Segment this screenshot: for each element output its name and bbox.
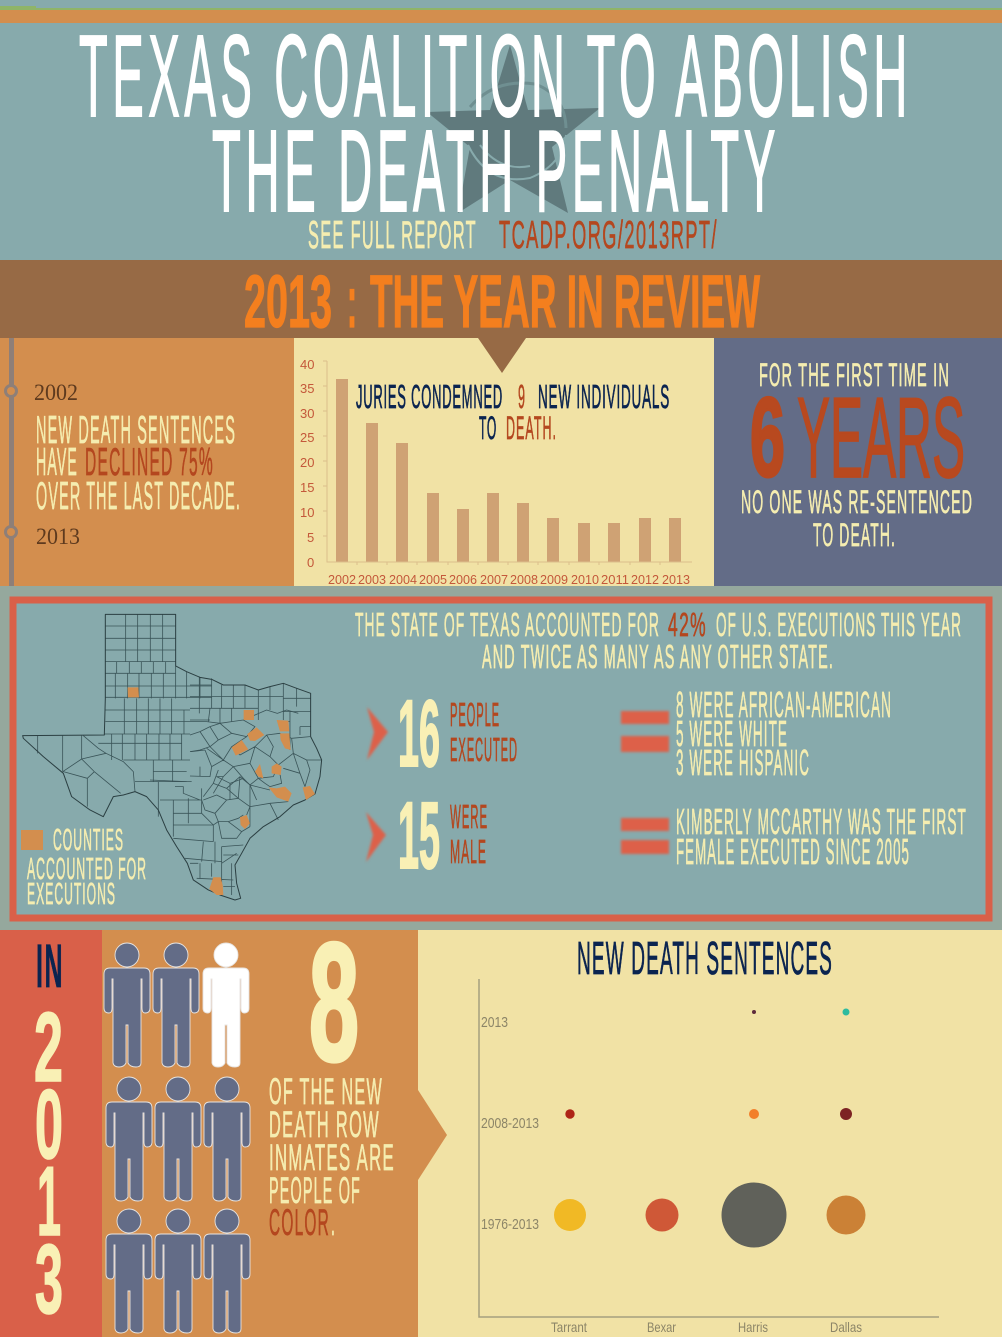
- equals: 15: [621, 818, 669, 854]
- panel: in 2013 column: IN: [36, 932, 64, 1000]
- panel: people of color: [102, 908, 418, 1337]
- x axis labels: 2007: [480, 572, 508, 587]
- Texas share text: [355, 606, 962, 675]
- vertical year: [34, 992, 63, 1334]
- panel: people of color: INMATES ARE: [269, 1137, 395, 1178]
- panel: bar chart: NEW INDIVIDUALS: [538, 378, 670, 415]
- x axis labels: 2012: [631, 572, 659, 587]
- header panel: TCADP.ORG/2013RPT/: [499, 214, 718, 257]
- breakdown by race: 5 WERE WHITE: [676, 713, 788, 754]
- y axis labels: 35: [300, 381, 314, 396]
- bubble chart row labels: 1976-2013: [481, 1216, 539, 1233]
- bubble chart column labels: Dallas: [830, 1319, 862, 1335]
- arrow: panel pointer: [418, 1090, 447, 1180]
- y axis labels: 25: [300, 430, 314, 445]
- panel: new death sentences: [418, 930, 1002, 1337]
- y axis labels: 30: [300, 406, 314, 421]
- chart caption: 9: [518, 378, 526, 415]
- arrow: banner pointer: [478, 338, 526, 373]
- female execution note: [676, 801, 967, 872]
- bubble chart column labels: Harris: [738, 1319, 768, 1335]
- panel: bar chart: [294, 338, 714, 587]
- text: NEW DEATH SENTENCES: [36, 409, 236, 452]
- y axis labels: 40: [300, 357, 314, 372]
- panel: in 2013 column: 1: [37, 1146, 61, 1256]
- title: [79, 11, 912, 236]
- panel: executions: PEOPLE: [450, 696, 500, 733]
- chart caption: JURIES CONDEMNED: [356, 378, 503, 415]
- x axis labels: 2009: [540, 572, 568, 587]
- y axis labels: 15: [300, 480, 314, 495]
- x axis labels: [328, 572, 690, 587]
- bubble chart column labels: Bexar: [647, 1319, 676, 1335]
- bubble chart column labels: [551, 1319, 862, 1335]
- bubble chart row labels: [481, 1014, 539, 1233]
- map legend: [21, 822, 147, 911]
- panel: decline timeline: 2013: [36, 524, 80, 549]
- six years figure: 6: [750, 375, 785, 500]
- stat: 16 people executed: 16: [398, 681, 440, 787]
- chart caption: [356, 378, 670, 446]
- map legend: EXECUTIONS: [27, 876, 116, 911]
- y axis labels: 5: [307, 530, 314, 545]
- vertical year: 2: [34, 992, 63, 1102]
- bubbles: [554, 1008, 866, 1248]
- arrow: 15: [366, 812, 386, 862]
- breakdown by race: [676, 684, 892, 783]
- panel: executions: EXECUTED: [450, 731, 518, 768]
- Texas share text: 42%: [668, 606, 707, 643]
- highlighted counties: [128, 687, 315, 895]
- panel: in 2013 column: [0, 930, 102, 1337]
- panel: executions: ACCOUNTED FOR: [27, 851, 147, 886]
- x axis labels: 2013: [662, 572, 690, 587]
- vertical year: 3: [35, 1224, 63, 1334]
- panel: decline timeline: 2002: [34, 380, 78, 405]
- panel: executions: MALE: [450, 833, 487, 870]
- chart caption: DEATH.: [506, 410, 557, 446]
- icons: nine people: [104, 943, 250, 1333]
- panel: people of color: OF THE NEW: [269, 1071, 383, 1112]
- x axis labels: 2004: [389, 572, 417, 587]
- x axis labels: 2008: [510, 572, 538, 587]
- decline text: [36, 409, 241, 518]
- big number 8: 8: [309, 908, 359, 1096]
- x axis labels: 2010: [571, 572, 599, 587]
- x axis labels: 2003: [358, 572, 386, 587]
- y axis labels: 10: [300, 505, 314, 520]
- panel: six years: [714, 338, 1002, 586]
- stat: 15 were male: 15: [398, 783, 440, 889]
- year in review banner: [0, 260, 1002, 343]
- map legend: COUNTIES: [53, 822, 124, 857]
- arrow: 16: [367, 707, 388, 760]
- six years figure: [750, 375, 965, 502]
- text: OVER THE LAST DECADE.: [36, 475, 241, 518]
- decline text: HAVE: [36, 441, 78, 484]
- report link: SEE FULL REPORT: [308, 214, 477, 257]
- Texas outline: [23, 614, 322, 900]
- x axis labels: 2006: [449, 572, 477, 587]
- x axis labels: 2005: [419, 572, 447, 587]
- people of color text: DEATH ROW: [269, 1104, 380, 1145]
- map: Texas counties: [23, 614, 322, 900]
- panel: executions: [0, 586, 1002, 930]
- year in review banner: :: [347, 260, 357, 343]
- bubble chart column labels: Tarrant: [551, 1319, 587, 1335]
- chart caption: TO: [479, 410, 497, 446]
- bubble chart row labels: 2013: [481, 1014, 508, 1031]
- vertical year: 0: [35, 1069, 63, 1179]
- year in review banner: 2013: [244, 260, 332, 343]
- people of color text: COLOR: [269, 1202, 330, 1243]
- x axis labels: 2011: [601, 572, 629, 587]
- people of color text: [269, 1071, 395, 1243]
- x axis labels: 2002: [328, 572, 356, 587]
- people of color text: .: [331, 1202, 336, 1243]
- people of color text: PEOPLE OF: [269, 1170, 361, 1211]
- icon: star logo: [427, 45, 600, 213]
- bars: [336, 379, 681, 562]
- panel: six years: TO DEATH.: [813, 517, 896, 553]
- y axis labels: 0: [307, 555, 314, 570]
- header panel: [0, 0, 1002, 260]
- panel: decline timeline: [0, 338, 294, 586]
- y axis labels: 20: [300, 455, 314, 470]
- y axis labels: [300, 357, 314, 570]
- panel: decline timeline: DECLINED 75%: [85, 441, 214, 484]
- equals: 16: [621, 711, 669, 752]
- bubble chart row labels: 2008-2013: [481, 1115, 539, 1132]
- panel: executions: WERE: [450, 798, 488, 835]
